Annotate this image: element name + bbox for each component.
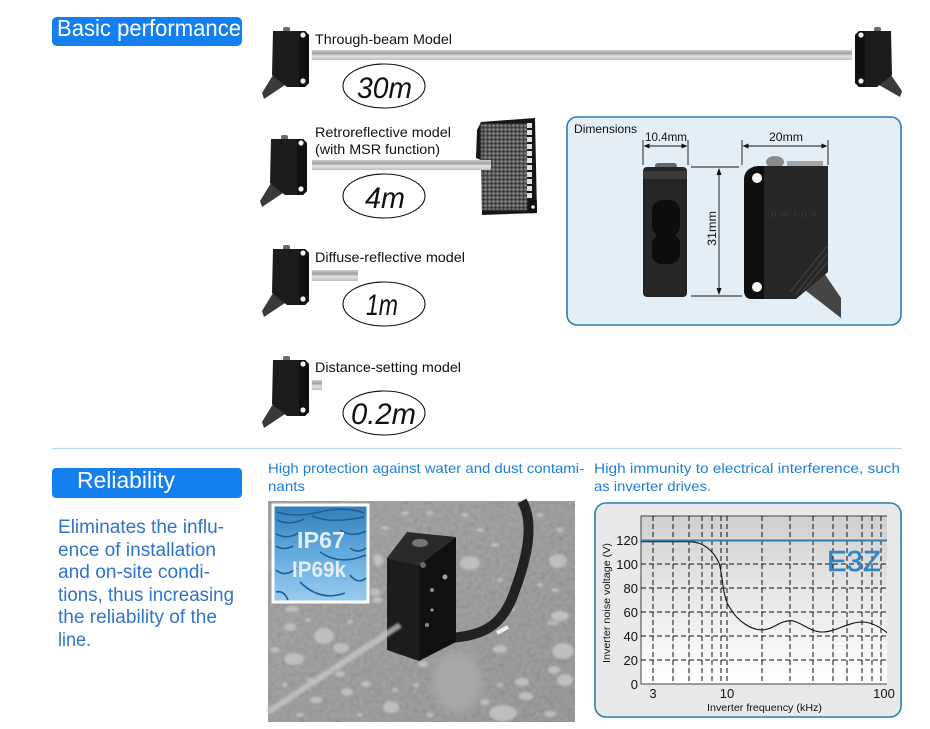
y axis tick labels: 20 — [624, 653, 638, 668]
curve: inverter noise limit — [641, 542, 887, 633]
x axis tick labels: 3 — [649, 686, 657, 701]
series label: E3Z: E3Z — [827, 546, 881, 578]
heading: Reliability — [52, 467, 242, 498]
icon: sensor — [260, 135, 307, 207]
beam: distance-setting — [312, 380, 322, 390]
plot area — [641, 516, 887, 684]
reference line: 120 V — [641, 540, 887, 542]
x axis tick labels: 10 — [720, 686, 734, 701]
text block: reliability description: line. — [58, 630, 91, 651]
text block: electrical interference immunity: High immunity to electrical interference, such — [594, 460, 900, 476]
water jet — [268, 625, 400, 712]
x axis tick labels — [649, 686, 895, 701]
x axis tick labels: 100 — [873, 686, 895, 701]
text block: reliability description: ence of installation — [58, 540, 216, 561]
icon: sensor — [262, 245, 309, 317]
drawing: sensor side view: omron — [771, 209, 817, 220]
y axis title: Inverter noise voltage (V) — [601, 543, 613, 663]
row: diffuse-reflective model — [262, 245, 465, 326]
badge: IP67 IP69k — [273, 505, 368, 602]
text block: electrical interference immunity — [594, 460, 900, 494]
text block: water and dust protection — [268, 460, 584, 494]
text block: reliability description: and on-site condi- — [58, 562, 210, 583]
row: distance-setting model — [262, 356, 461, 435]
water droplets — [270, 511, 574, 721]
range badge: 4m — [343, 174, 425, 218]
label: retroreflective model: Retroreflective model — [315, 124, 451, 140]
dimension: width 10.4mm: 10.4mm — [645, 130, 687, 144]
badge: IP67 IP69k: IP69k — [292, 557, 347, 582]
text block: reliability description: the reliability of the — [58, 607, 217, 628]
sensor body — [387, 532, 456, 661]
badge: IP67 IP69k: IP67 — [297, 527, 345, 553]
row: retroreflective model — [260, 118, 537, 218]
label: retroreflective model — [315, 124, 451, 157]
text block: reliability description: tions, thus increasing — [58, 585, 234, 606]
y axis tick labels: 0 — [631, 677, 638, 692]
puddle — [433, 652, 481, 712]
text block: water and dust protection: High protection against water and dust contami- — [268, 460, 584, 476]
panel: inverter noise chart — [595, 503, 901, 717]
y axis tick labels: 60 — [624, 605, 638, 620]
drawing: sensor front view — [643, 163, 687, 297]
range badge: 4m: 4m — [365, 182, 405, 215]
drawing: sensor side view — [744, 156, 841, 318]
cable — [450, 501, 529, 638]
icon: emitter sensor — [262, 27, 309, 99]
text block: reliability description: Eliminates the influ- — [58, 517, 224, 538]
dimension: height 31mm — [691, 167, 742, 296]
beam: retroreflective — [312, 160, 491, 170]
label: distance-setting model: Distance-setting model — [315, 359, 461, 375]
range badge: 1m: 1m — [366, 289, 398, 322]
dimension: depth 20mm — [742, 130, 828, 165]
label: diffuse-reflective model: Diffuse-reflective model — [315, 249, 465, 265]
dimension: width 10.4mm — [643, 130, 688, 165]
label: retroreflective model: (with MSR function) — [315, 141, 440, 157]
photo: wet sensor — [268, 501, 575, 722]
y axis tick labels — [616, 533, 638, 692]
y axis tick labels: 40 — [624, 629, 638, 644]
heading: Reliability: Reliability — [77, 467, 175, 493]
text block: electrical interference immunity: as inverter drives. — [594, 478, 711, 494]
row: through-beam model — [262, 27, 902, 108]
beam: through-beam — [312, 50, 852, 60]
range badge: 1m — [343, 282, 425, 326]
dimension: height 31mm: 31mm — [705, 211, 719, 246]
range badge: 30m — [343, 64, 425, 108]
label: through-beam model: Through-beam Model — [315, 31, 452, 47]
icon: receiver sensor — [855, 27, 902, 97]
y axis tick labels: 80 — [624, 581, 638, 596]
range badge: 0.2m: 0.2m — [351, 398, 416, 431]
x axis title: Inverter frequency (kHz) — [707, 702, 822, 714]
grid lines — [641, 516, 887, 684]
beam: diffuse-reflective — [312, 270, 358, 281]
icon: reflector — [476, 118, 537, 215]
icon: sensor — [262, 356, 309, 428]
y axis tick labels: 100 — [616, 557, 638, 572]
divider — [52, 448, 902, 450]
label: dimensions: Dimensions — [574, 122, 637, 136]
text block: water and dust protection: nants — [268, 478, 305, 494]
dimension: depth 20mm: 20mm — [769, 130, 803, 144]
text block: reliability description — [58, 517, 234, 651]
range badge: 30m: 30m — [357, 72, 412, 105]
panel: dimensions — [567, 117, 901, 325]
heading: Basic performance: Basic performance — [57, 15, 241, 41]
y axis tick labels: 120 — [616, 533, 638, 548]
range badge: 0.2m — [343, 391, 425, 435]
